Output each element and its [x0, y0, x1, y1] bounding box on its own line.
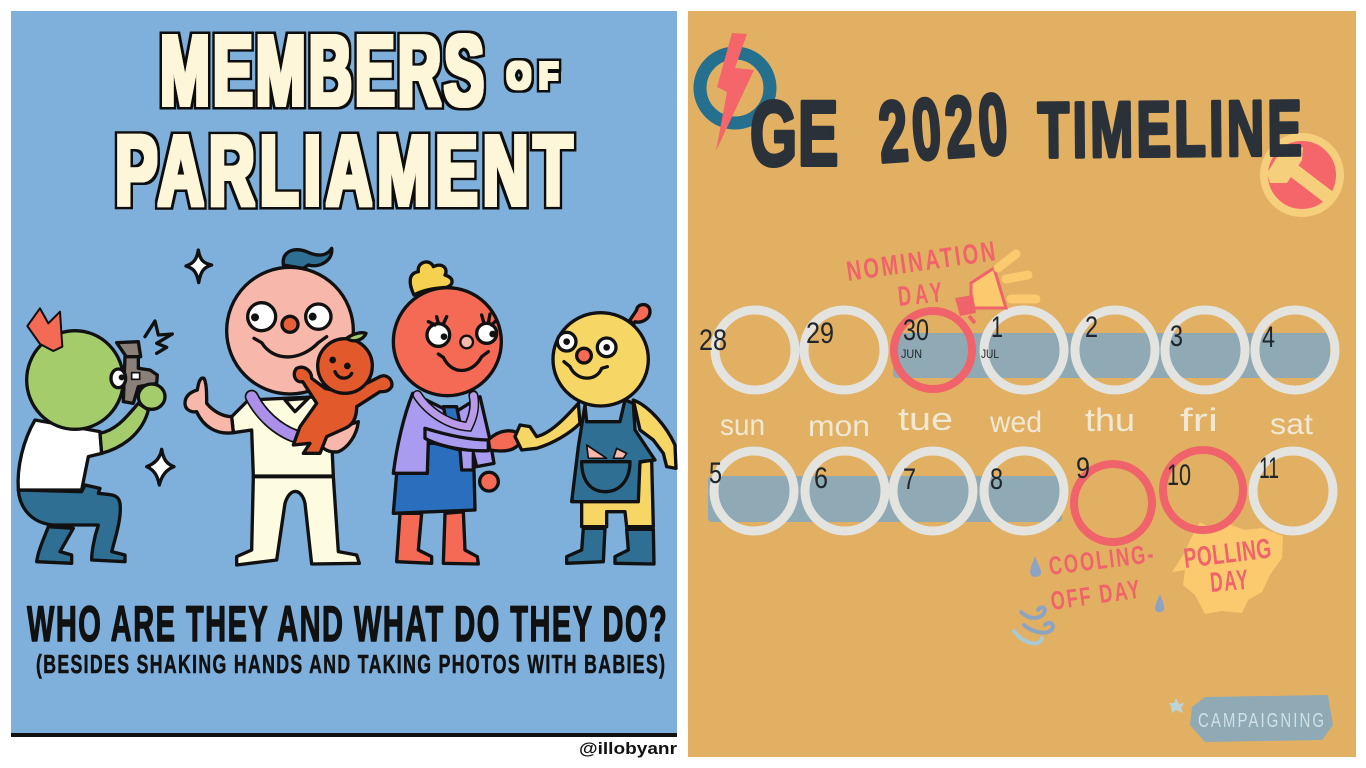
- label: polling day: DAY: [1209, 564, 1250, 598]
- calendar: weekday labels: wed: [989, 406, 1042, 439]
- legend: campaigning: CAMPAIGNING: [1198, 709, 1324, 732]
- calendar: weekday labels: sat: [1270, 408, 1314, 441]
- calendar: weekday labels: thu: [1085, 402, 1135, 438]
- icon: camera flash: [145, 321, 172, 353]
- calendar: date numbers: 9: [1076, 452, 1090, 485]
- title: GE 2020 timeline: [750, 77, 1302, 185]
- calendar: date circles: [714, 310, 1335, 542]
- label: polling day: [1172, 522, 1283, 614]
- calendar: date numbers: 3: [1170, 320, 1183, 353]
- character: fishmonger: [515, 305, 676, 564]
- label: cooling-off day: OFF DAY: [1049, 575, 1142, 616]
- calendar: date numbers: [699, 311, 1279, 496]
- character: photographer: [18, 308, 172, 563]
- calendar: date numbers: 28: [699, 324, 727, 357]
- title: GE 2020 timeline: TIMELINE: [1037, 85, 1302, 175]
- label: polling day: POLLING: [1182, 533, 1273, 575]
- calendar: date numbers: 30: [903, 314, 929, 347]
- heading: who are they: WHO ARE THEY AND WHAT DO THEY DO?: [27, 596, 667, 652]
- calendar: weekday labels: sun: [720, 409, 765, 442]
- title: members of parliament: OF: [507, 57, 558, 97]
- panel: members of parliament: [11, 11, 677, 737]
- calendar: date numbers: 6: [814, 462, 828, 495]
- label: nomination day: NOMINATION: [845, 236, 997, 288]
- label: nomination day: [845, 236, 997, 313]
- label: cooling-off day: [1047, 539, 1155, 616]
- calendar: weekday labels: mon: [808, 410, 870, 443]
- icon: hammer logo: [1264, 137, 1340, 213]
- calendar: date numbers: 8: [990, 463, 1003, 496]
- icon: cooling drops and wind: [1014, 556, 1164, 643]
- icon: sparkle bottom: [147, 449, 174, 485]
- calendar: date numbers: 4: [1262, 321, 1275, 354]
- title: GE 2020 timeline: 2020: [876, 77, 1010, 181]
- calendar: date numbers: 10: [1167, 459, 1191, 492]
- icon: lightning logo: [700, 33, 770, 151]
- calendar: date numbers: JUN: [901, 347, 922, 361]
- calendar: weekday labels: fri: [1180, 402, 1218, 438]
- character: woman: [393, 262, 522, 564]
- credit: illobyanr: @illobyanr: [579, 739, 677, 758]
- calendar: date numbers: 1: [991, 311, 1003, 344]
- calendar: weekday labels: [720, 401, 1314, 443]
- panel: GE 2020 timeline: [688, 11, 1356, 757]
- character: man with baby: [185, 248, 392, 565]
- title: members of parliament: [115, 15, 573, 226]
- calendar: date numbers: JUL: [981, 347, 999, 361]
- title: GE 2020 timeline: GE: [750, 81, 838, 185]
- icon: sparkle top: [186, 250, 212, 283]
- subheading: besides shaking hands: (BESIDES SHAKING HANDS AND TAKING PHOTOS WITH BABIES): [36, 650, 665, 679]
- garland: [252, 397, 297, 437]
- character: baby: [293, 333, 392, 453]
- label: nomination day: DAY: [897, 278, 944, 313]
- calendar: date numbers: 29: [806, 317, 834, 350]
- label: cooling-off day: COOLING-: [1047, 539, 1155, 581]
- icon: megaphone: [955, 254, 1036, 323]
- calendar: weekday labels: tue: [898, 401, 953, 437]
- calendar: date numbers: 11: [1259, 452, 1279, 485]
- title: members of parliament: PARLIAMENT: [115, 114, 573, 226]
- calendar: date numbers: 2: [1085, 311, 1098, 344]
- calendar: campaigning bands: [708, 333, 1330, 522]
- legend: campaigning: [1169, 695, 1333, 742]
- calendar: date numbers: 5: [709, 457, 722, 490]
- illustration: characters: [18, 248, 676, 565]
- calendar: date numbers: 7: [903, 463, 916, 496]
- title: members of parliament: MEMBERS: [160, 15, 484, 127]
